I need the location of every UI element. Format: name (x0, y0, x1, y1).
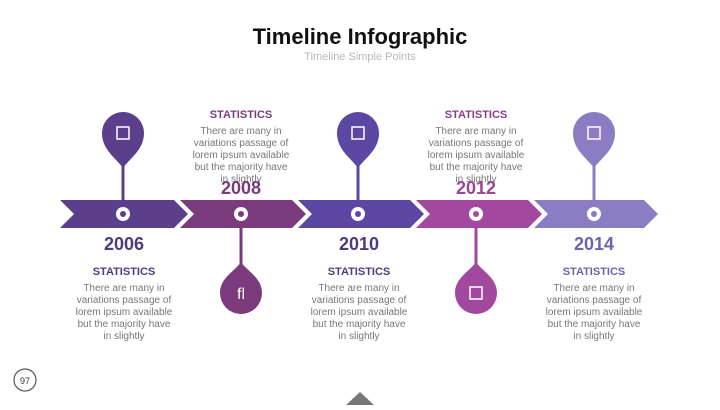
text block 2014: 2014 (574, 234, 614, 254)
subtitle: Timeline Simple Points (304, 51, 416, 63)
text block 2010 (311, 234, 408, 342)
text block 2010: but the majority have (313, 319, 406, 330)
page number (14, 369, 36, 391)
text block 2008 (193, 109, 290, 198)
text block 2010: in slightly (338, 331, 380, 342)
text block 2010: variations passage of (312, 295, 406, 306)
milestone 2010 pin (top) (337, 112, 379, 221)
text block 2012: in slightly (455, 174, 497, 185)
text block 2008: There are many in (200, 126, 282, 137)
text block 2008: variations passage of (194, 138, 288, 149)
text block 2006: There are many in (83, 283, 165, 294)
text block 2014: variations passage of (547, 295, 641, 306)
text block 2006: lorem ipsum available (76, 307, 173, 318)
text block 2014: lorem ipsum available (546, 307, 643, 318)
page number: 97 (20, 376, 30, 386)
text block 2006: but the majority have (78, 319, 171, 330)
text block 2014: but the majority have (548, 319, 641, 330)
title: Timeline Infographic (253, 24, 467, 49)
text block 2010: There are many in (318, 283, 400, 294)
text block 2014 (546, 234, 643, 342)
text block 2012: variations passage of (429, 138, 523, 149)
text block 2008: in slightly (220, 174, 262, 185)
timeline arrow bar (60, 200, 658, 228)
text block 2012: but the majority have (430, 162, 523, 173)
text block 2006: in slightly (103, 331, 145, 342)
text block 2012: There are many in (435, 126, 517, 137)
milestone 2012 pin (bottom) (455, 207, 497, 314)
text block 2010: lorem ipsum available (311, 307, 408, 318)
milestone 2008 pin (bottom) (220, 207, 262, 314)
milestone 2006 pin (top) (102, 112, 144, 221)
text block 2012: STATISTICS (445, 109, 507, 121)
text block 2006 (76, 234, 173, 342)
text block 2006: variations passage of (77, 295, 171, 306)
text block 2008: but the majority have (195, 162, 288, 173)
text block 2010: STATISTICS (328, 266, 390, 278)
milestone 2008 pin (bottom): fl (237, 286, 245, 303)
text block 2012 (428, 109, 525, 198)
bottom triangle marker (346, 392, 374, 405)
text block 2008: STATISTICS (210, 109, 272, 121)
text block 2008: lorem ipsum available (193, 150, 290, 161)
text block 2014: STATISTICS (563, 266, 625, 278)
text block 2012: 2012 (456, 178, 496, 198)
text block 2006: STATISTICS (93, 266, 155, 278)
text block 2008: 2008 (221, 178, 261, 198)
text block 2014: There are many in (553, 283, 635, 294)
text block 2012: lorem ipsum available (428, 150, 525, 161)
milestone 2014 pin (top) (573, 112, 615, 221)
text block 2006: 2006 (104, 234, 144, 254)
text block 2014: in slightly (573, 331, 615, 342)
text block 2010: 2010 (339, 234, 379, 254)
